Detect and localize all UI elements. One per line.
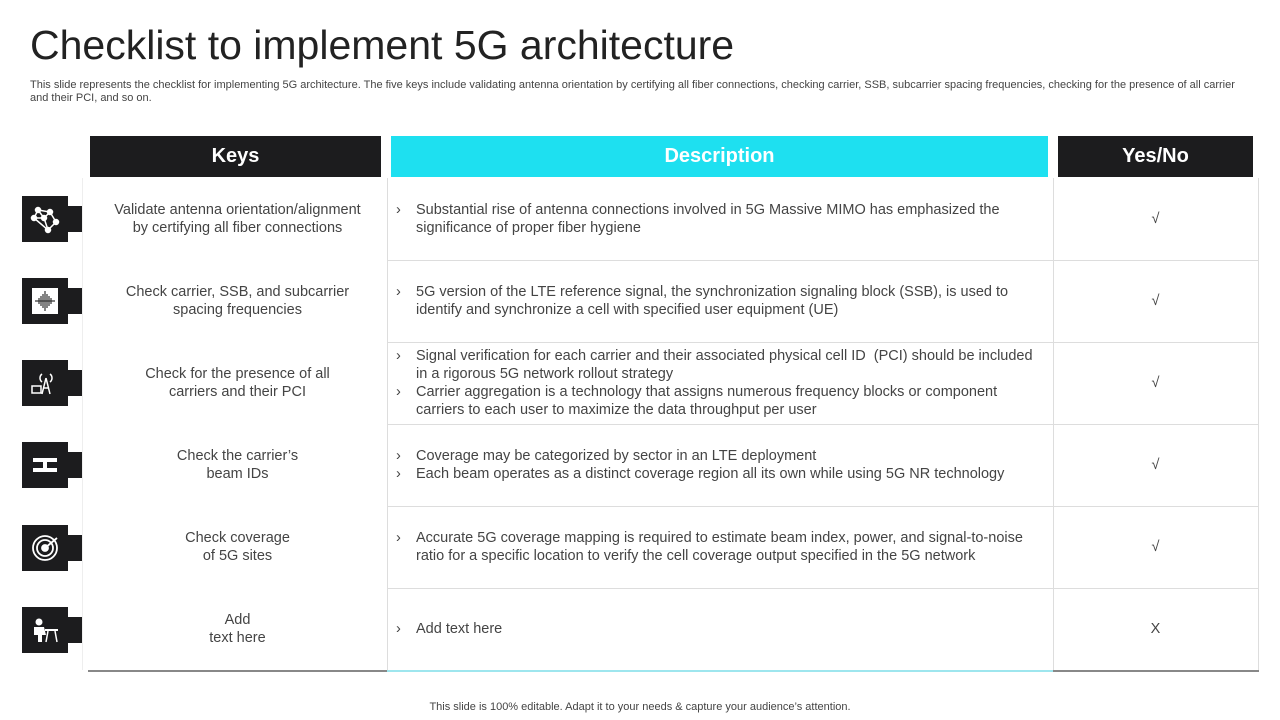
row 3 [22,348,1160,418]
row 5 [22,525,1160,571]
row 2 [22,278,1160,324]
status: X [1151,621,1160,637]
row 4 [22,442,1160,488]
description: Signal verification for each carrier and their associated physical cell ID (PCI) should be included in a rigorous 5G network rollout strategy [416,348,1033,382]
key text: beam IDs [206,466,269,482]
key text: of 5G sites [203,548,272,564]
description: 5G version of the LTE reference signal, the synchronization signaling block (SSB), is used to identify and synchronize a cell with specified user equipment (UE) [416,284,1008,318]
key text: Check coverage [185,530,290,546]
status: √ [1152,293,1159,309]
description: Substantial rise of antenna connections involved in 5G Massive MIMO has emphasized the significance of proper fiber hygiene [416,202,1000,236]
key text: text here [209,630,266,646]
status: √ [1152,375,1159,391]
row 6 [22,607,1160,653]
status: √ [1152,211,1159,227]
status: √ [1152,457,1159,473]
key text: Add [225,612,250,628]
key text: Validate antenna orientation/alignment [114,202,361,218]
header: description [391,136,1048,177]
description [396,448,1004,482]
description: Accurate 5G coverage mapping is required to estimate beam index, power, and signal-to-noise ratio for a specific location to verify the cell coverage output specified in the 5G network [416,530,1023,564]
header: description: Description [664,145,775,167]
description: Carrier aggregation is a technology that assigns numerous frequency blocks or component carriers to each user to maximize the data throughput per user [416,384,997,418]
header: yes/no: Yes/No [1122,145,1189,167]
key text: carriers and their PCI [169,384,306,400]
key text: Check for the presence of all [145,366,330,382]
key text [114,202,361,236]
footer: This slide is 100% editable. Adapt it to your needs & capture your audience’s attention. [429,701,851,713]
icon: tower [22,360,68,406]
header: yes/no [1058,136,1253,177]
header: keys: Keys [212,145,259,167]
description: Add text here [416,621,502,637]
header: keys [90,136,381,177]
key text: Check the carrier’s [177,448,298,464]
key text [145,366,330,400]
description: Coverage may be categorized by sector in an LTE deployment [416,448,816,464]
icon: waveform [22,278,68,324]
description [396,348,1033,418]
subtitle: This slide represents the checklist for implementing 5G architecture. The five keys include validating antenna orientation by certifying all fiber connections, checking carrier, SSB, subcarrier spacing frequencies, checking for the presence of all carrier and their PCI, and so on. [30,79,1235,104]
icon: coverage [22,525,68,571]
status: √ [1152,539,1159,555]
icon: beam [22,442,68,488]
key text [209,612,266,646]
icon: network [22,196,68,242]
row 1 [22,196,1160,242]
key text [185,530,290,564]
key text: spacing frequencies [173,302,302,318]
key text [126,284,349,318]
key text: Check carrier, SSB, and subcarrier [126,284,349,300]
key text [177,448,298,482]
icon: worker [22,607,68,653]
description: Each beam operates as a distinct coverage region all its own while using 5G NR technology [416,466,1004,482]
key text: by certifying all fiber connections [133,220,342,236]
title: Checklist to implement 5G architecture [30,22,734,68]
